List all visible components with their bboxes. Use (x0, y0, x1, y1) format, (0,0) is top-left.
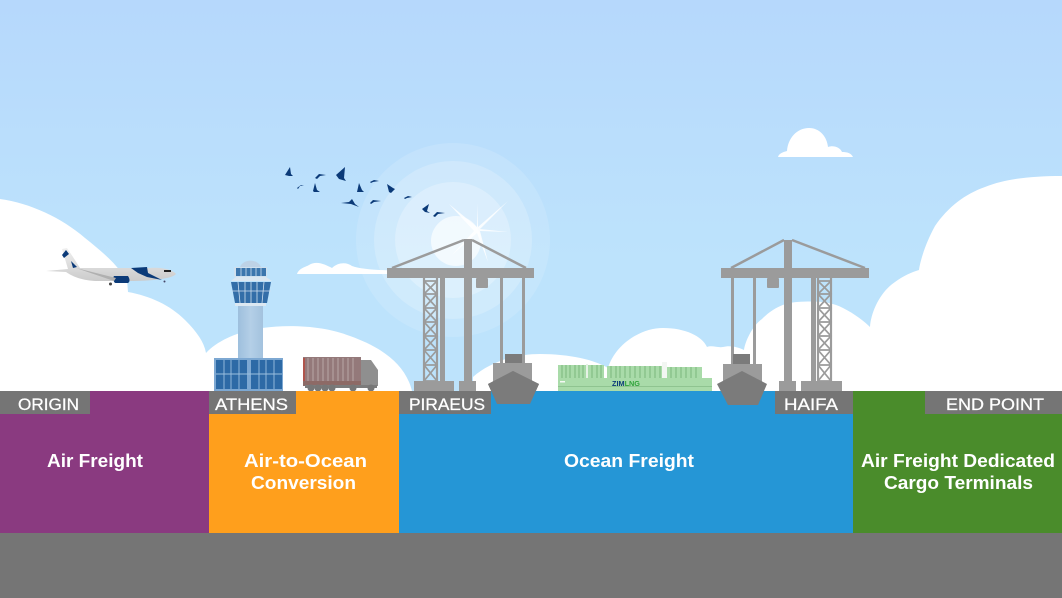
container ship ZIM LNG (558, 362, 712, 391)
cloud: top right small (778, 128, 853, 157)
cloud: center horizon (473, 176, 1062, 391)
band: Air Freight Dedicated Cargo Terminals (853, 391, 1062, 533)
heading: Air-to-Ocean Conversion (244, 450, 367, 493)
band: Ocean Freight (399, 391, 853, 533)
crane: Piraeus (387, 239, 534, 391)
heading: Air-to-Ocean Conversion: Air-to-Ocean (244, 450, 367, 471)
ship hull overlap: Piraeus (488, 371, 539, 404)
label: END POINT (925, 391, 1062, 414)
ship: Haifa (bow view) (717, 354, 767, 405)
heading: Ocean Freight: Ocean Freight (564, 450, 694, 471)
label: ATHENS: ATHENS (215, 396, 288, 414)
label: HAIFA: HAIFA (784, 396, 838, 414)
ship: Piraeus (bow view) (488, 354, 539, 404)
label: PIRAEUS (399, 391, 491, 414)
band: Air-to-Ocean Conversion (209, 391, 399, 533)
label: END POINT: END POINT (946, 396, 1044, 414)
heading: Air Freight: Air Freight (47, 450, 143, 471)
container ship ZIM LNG: ZIMLNG (612, 379, 640, 388)
crane: Haifa (721, 240, 869, 391)
footer band (0, 533, 1062, 598)
flock of birds (285, 167, 445, 217)
label: HAIFA (775, 391, 853, 414)
truck with container (303, 357, 378, 392)
clouds (0, 128, 1062, 391)
airplane (46, 248, 176, 286)
heading: Air Freight Dedicated Cargo Terminals: Air Freight Dedicated (861, 450, 1055, 471)
heading: Air Freight Dedicated Cargo Terminals (861, 450, 1055, 493)
air traffic control tower (214, 261, 283, 391)
heading: Air Freight Dedicated Cargo Terminals: Cargo Terminals (884, 472, 1033, 493)
cloud: large left (0, 199, 412, 391)
sky background (0, 0, 1062, 398)
label: PIRAEUS: PIRAEUS (409, 396, 485, 414)
label: ATHENS (209, 391, 296, 414)
label: ORIGIN: ORIGIN (18, 396, 79, 414)
label: ORIGIN (0, 391, 90, 414)
heading: Air-to-Ocean Conversion: Conversion (251, 472, 356, 493)
sun with glow rings (356, 143, 550, 337)
band: Air Freight (0, 391, 209, 533)
cloud: small behind tower (297, 263, 400, 274)
